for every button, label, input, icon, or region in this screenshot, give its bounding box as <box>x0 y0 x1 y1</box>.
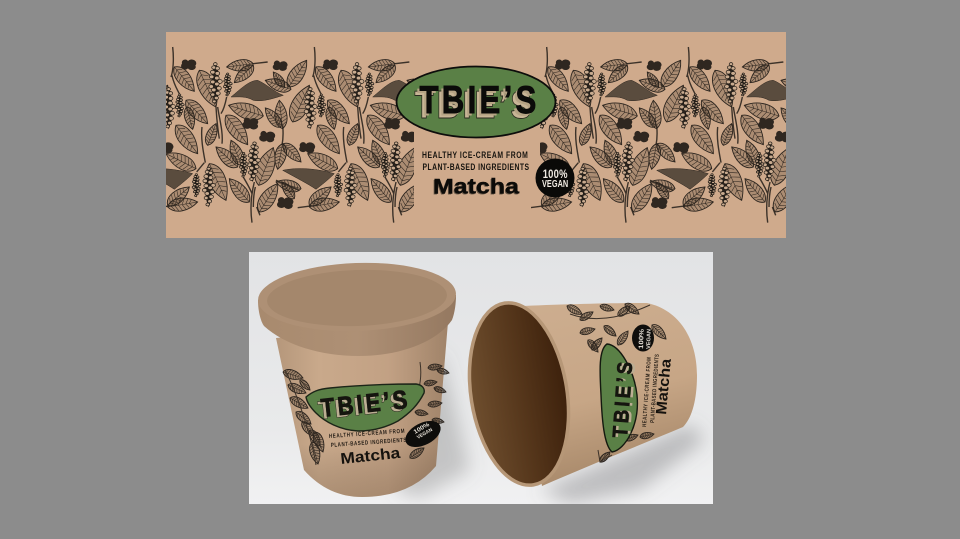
badge: 100% vegan: VEGAN <box>542 178 568 189</box>
flavour name: Matcha: Matcha <box>433 174 520 198</box>
open cup mouth <box>468 301 570 487</box>
logo: green oval with TBIE'S: TBIE’S <box>417 81 534 124</box>
cup logo: TBIE’S <box>320 385 409 423</box>
cup badge: VEGAN <box>416 427 434 441</box>
flavour name: Matcha: Matcha <box>432 176 519 200</box>
open cup logo: TBIE’S <box>609 361 638 438</box>
open cup badge: VEGAN <box>646 329 653 349</box>
tagline: HEALTHY ICE-CREAM FROM <box>422 150 528 160</box>
lid top <box>258 262 456 328</box>
open cup logo: TBIE’S <box>612 361 641 438</box>
right botanical pattern <box>531 46 786 223</box>
tagline: PLANT-BASED INGREDIENTS <box>422 162 529 172</box>
cup shadows <box>395 350 705 504</box>
left botanical pattern <box>166 46 414 223</box>
cup tagline: PLANT-BASED INGREDIENTS <box>331 437 407 449</box>
cup tagline <box>329 428 406 447</box>
closed cup with lid <box>257 260 457 497</box>
open cup bottom leaves <box>598 431 655 464</box>
logo: green oval with TBIE'S <box>396 66 556 138</box>
open cup tagline: PLANT-BASED INGREDIENTS <box>649 353 661 423</box>
cup flavour name: Matcha <box>340 445 402 468</box>
logo: green oval with TBIE'S: TBIE’S <box>420 79 536 122</box>
open cup tagline <box>642 354 659 427</box>
panel: flat label artwork <box>141 32 828 238</box>
cup badge <box>405 421 441 447</box>
panel: product mockup photo <box>249 252 713 504</box>
open cup on its side <box>457 296 697 492</box>
open cup tagline: HEALTHY ICE-CREAM FROM <box>641 357 653 427</box>
cup logo <box>306 384 424 431</box>
badge: 100% vegan <box>536 158 574 198</box>
badge: 100% vegan: 100% <box>543 168 568 181</box>
lid rim <box>258 295 456 356</box>
lid inner face <box>267 270 447 326</box>
open cup flavour name: Matcha <box>653 357 675 415</box>
open cup logo <box>600 344 641 452</box>
cup left leaves <box>282 368 327 465</box>
cup badge: 100% <box>413 422 431 436</box>
cup body <box>276 322 448 497</box>
tagline <box>422 150 529 172</box>
cup right leaves <box>408 362 450 461</box>
open cup badge <box>632 324 654 352</box>
logo: green oval with TBIE'S: TBIE’S <box>414 84 531 127</box>
open cup top leaves <box>565 301 669 354</box>
cup logo: TBIE’S <box>317 388 406 426</box>
open cup badge: 100% <box>638 329 646 349</box>
cup tagline: HEALTHY ICE-CREAM FROM <box>329 428 405 440</box>
open cup body <box>510 302 697 486</box>
